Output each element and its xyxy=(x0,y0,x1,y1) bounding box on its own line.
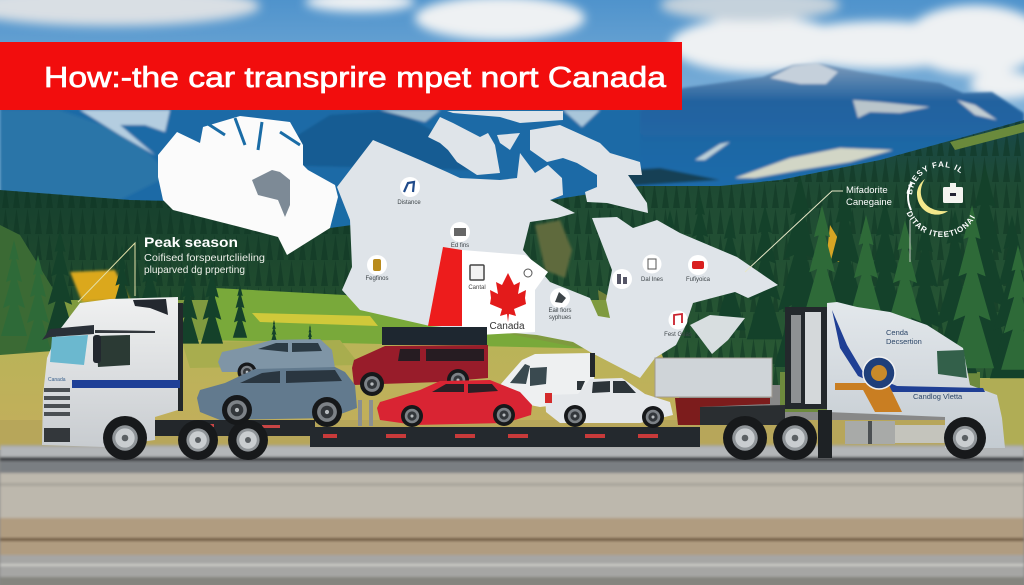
background: mountains xyxy=(0,63,1024,208)
rear rack xyxy=(785,307,827,409)
fuel tank xyxy=(845,421,895,444)
callout heading: Peak season xyxy=(144,234,238,250)
callout: peak season: pluparved dg prperting xyxy=(144,265,245,276)
icon: distance: Distance xyxy=(397,200,421,206)
map: Arctic islands xyxy=(428,111,648,213)
icon: tools: Dal Ines xyxy=(641,277,663,283)
orange band xyxy=(835,383,902,412)
wheel: tandem front xyxy=(773,416,817,460)
icon: small pin xyxy=(524,269,532,277)
cab body xyxy=(827,302,1005,448)
badge text top: BHESY FAL IL xyxy=(906,161,962,194)
wheel: right cab steer xyxy=(944,417,986,459)
grille xyxy=(44,388,70,416)
icon label: Cantal xyxy=(468,285,486,291)
callout: right label xyxy=(745,185,892,272)
icon: briefcase xyxy=(943,183,963,203)
road xyxy=(0,445,1024,585)
cars on trailer xyxy=(197,327,673,428)
icon: fees: Fegfinos xyxy=(365,276,389,282)
callout: right label: Canegaine xyxy=(846,197,892,208)
icon: distance xyxy=(397,177,421,206)
car: blue SUV bottom xyxy=(197,367,357,427)
map of Canada xyxy=(158,111,778,378)
badge: moon and briefcase xyxy=(906,161,975,262)
icon: rail: Eail fiors xyxy=(548,308,572,314)
icon: music note: Fest Geas xyxy=(664,332,692,338)
wheel: trailer rear right xyxy=(228,420,268,460)
windshield xyxy=(50,335,88,365)
icon: music note xyxy=(664,310,692,338)
background: conifer trees xyxy=(46,165,1024,378)
background: forest and fields xyxy=(0,120,1024,450)
icon: document xyxy=(470,265,484,280)
car: white pickup xyxy=(545,378,673,428)
window xyxy=(937,350,967,378)
map icons with labels xyxy=(365,177,711,338)
wheel: trailer rear left xyxy=(178,420,218,460)
icon: fuel: Ed fins xyxy=(451,243,469,249)
background: sky and clouds xyxy=(0,0,1024,200)
truck: right cab and box: Decsertion xyxy=(886,337,922,346)
icon: fees xyxy=(365,255,389,282)
map: Maritimes xyxy=(690,315,745,354)
icon: fuel xyxy=(450,222,470,249)
icon: crescent moon xyxy=(917,179,948,215)
car: white van xyxy=(500,353,596,407)
background: lighter foreground trees xyxy=(1,205,1024,370)
title: How:-the car transprire mpet nort Canada xyxy=(44,62,667,94)
callout: peak season xyxy=(78,234,265,302)
map: main landmass xyxy=(337,140,778,378)
truck: right cab and box xyxy=(655,302,1005,460)
cargo box xyxy=(655,358,772,397)
flag label: Canada xyxy=(489,321,525,332)
icon: tools xyxy=(641,254,663,283)
wheel: tandem rear xyxy=(723,416,767,460)
car: red sedan xyxy=(377,380,532,427)
wheel: left cab front xyxy=(103,416,147,460)
blue stripe xyxy=(832,310,985,392)
icon: maple leaf xyxy=(490,273,526,322)
truck: left white cab: Canada xyxy=(48,377,66,383)
flag panel with maple leaf xyxy=(428,247,548,336)
truck: left white cab xyxy=(42,297,183,460)
car: blue SUV top xyxy=(218,339,335,382)
callout body: Coifised forspeurtcliieling xyxy=(144,253,265,264)
badge text bottom: DITAR ITEETIONAI xyxy=(906,210,975,237)
title banner xyxy=(0,42,682,110)
map: western landmass xyxy=(158,116,338,255)
callout: right label: Mifadorite xyxy=(846,185,888,196)
cab text upper: Cenda xyxy=(886,328,909,337)
side window xyxy=(96,335,130,367)
car: red SUV with roof box xyxy=(352,327,488,396)
icon: red weather: Fufiyoica xyxy=(686,277,711,283)
icon: red weather xyxy=(686,255,711,283)
cab text lower: Candlog Vletta xyxy=(913,392,963,401)
icon: rail: syphues xyxy=(549,315,571,321)
car carrier flatbed xyxy=(155,400,700,460)
icon: building xyxy=(612,269,632,289)
blue stripe xyxy=(72,380,180,388)
logo circle xyxy=(863,357,895,389)
icon: rail xyxy=(548,288,572,321)
